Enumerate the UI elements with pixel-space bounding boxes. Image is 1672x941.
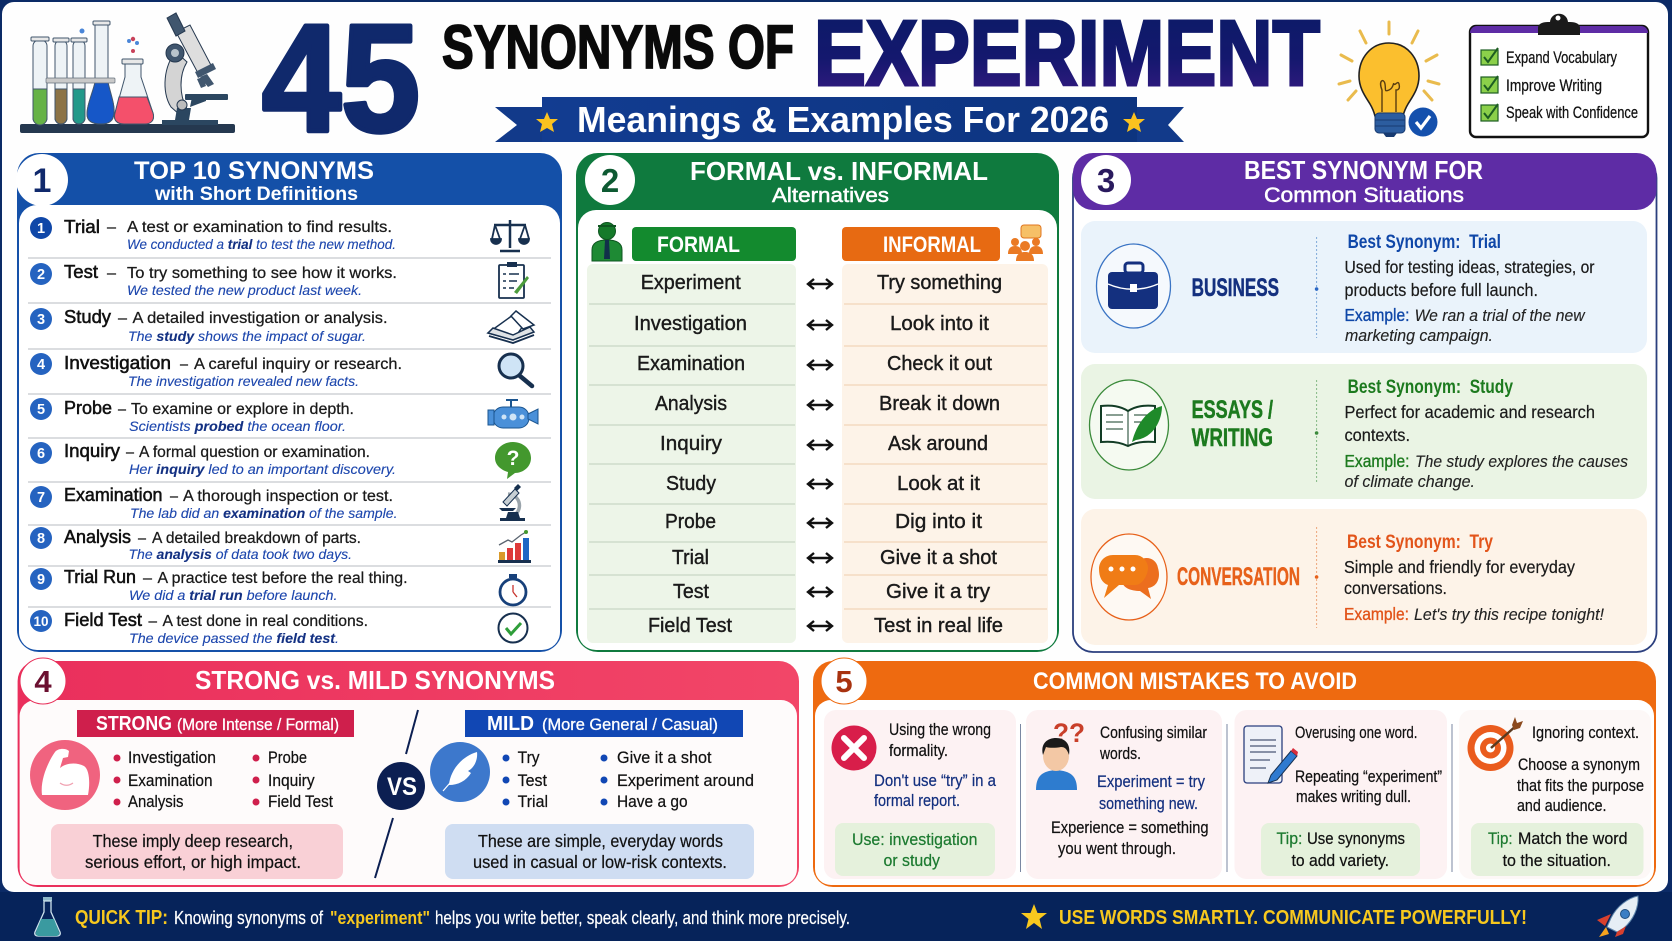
row 5: Probe: Scientists probed the ocean floor. <box>129 418 346 434</box>
formal column: Field Test <box>648 615 732 637</box>
card: conversation: Best Synonym: Try <box>1347 532 1493 553</box>
strong note: serious effort, or high impact. <box>85 852 301 872</box>
icon: muscle <box>30 740 100 810</box>
strong bullet list <box>114 749 333 811</box>
VS badge <box>375 710 425 878</box>
clipboard checklist <box>1470 14 1648 137</box>
panel 1 heading: TOP 10 SYNONYMS <box>134 157 374 185</box>
mistake 2: confusing similar words: Confusing similar <box>1100 724 1207 742</box>
title: synonyms of: SYNONYMS OF <box>442 13 794 81</box>
icon: submarine probe <box>488 400 538 428</box>
informal column: Check it out <box>887 353 992 375</box>
mild note: These are simple, everyday words <box>478 831 723 851</box>
icon: informal group <box>1008 225 1043 261</box>
card: essays and writing: Best Synonym: Study <box>1348 377 1513 398</box>
row 9: Trial Run <box>30 566 408 603</box>
card: business: products before full launch. <box>1344 280 1538 300</box>
strong note: These imply deep research, <box>93 831 293 851</box>
mild bullet list <box>502 749 754 811</box>
strong bullet list: Inquiry <box>268 772 315 790</box>
footer bar: QUICK TIP: <box>75 907 168 929</box>
mistake 4: ignoring context: Match the word <box>1518 830 1628 848</box>
row 3: Study: A detailed investigation or analysis. <box>132 310 388 327</box>
mistake 4: ignoring context: to the situation. <box>1503 852 1611 870</box>
card: essays and writing: ESSAYS / <box>1192 396 1273 424</box>
informal column: Dig into it <box>895 511 982 533</box>
strong heading <box>77 710 354 737</box>
mistake 2: confusing similar words: words. <box>1099 745 1141 763</box>
row 2: Test: Test <box>64 261 98 282</box>
informal heading pill <box>842 227 1000 261</box>
informal column: Give it a shot <box>880 547 997 569</box>
row 8: Analysis: Analysis <box>64 526 131 547</box>
card: essays and writing: contexts. <box>1344 425 1410 445</box>
subtitle ribbon: Meanings & Examples For 2026 <box>577 99 1109 140</box>
icon: document and pencil <box>1244 726 1298 783</box>
icon: red cross <box>832 726 876 770</box>
row 10: Field Test: A test done in real conditions. <box>162 613 368 630</box>
panel 3 heading <box>1081 155 1483 207</box>
informal heading pill: INFORMAL <box>883 232 981 257</box>
row 1: Trial: We conducted a trial to test the new method. <box>127 236 396 252</box>
icon: check circle <box>498 614 528 642</box>
formal column: Study <box>666 473 716 495</box>
mistake 3: overusing one word: Tip: <box>1276 830 1302 848</box>
row 3: Study: Study <box>64 306 112 327</box>
icon: clipboard list <box>499 262 529 298</box>
icon: flask <box>35 897 60 936</box>
row 10: Field Test <box>30 609 368 646</box>
row 2: Test: To try something to see how it works. <box>127 265 397 282</box>
row 4: Investigation: 4 <box>37 357 45 373</box>
mistake 4: ignoring context: that fits the purpose <box>1517 777 1644 795</box>
row 1: Trial <box>30 216 396 252</box>
mistake 1: wrong formality: or study <box>884 852 941 870</box>
icon: formal person <box>592 222 622 261</box>
mistake 3: overusing one word <box>1234 710 1447 879</box>
informal column: Test in real life <box>874 615 1003 637</box>
card: business: Example: <box>1344 305 1410 325</box>
mistake 4: ignoring context: and audience. <box>1517 797 1606 815</box>
card: essays and writing: The study explores the causes <box>1415 453 1628 471</box>
row 9: Trial Run: We did a trial run before launch. <box>129 587 338 603</box>
mild heading: (More General / Casual) <box>542 716 718 734</box>
strong bullet list: Probe <box>268 749 307 767</box>
row 1: Trial: 1 <box>37 221 45 237</box>
mistake 1: wrong formality: Using the wrong <box>889 721 991 739</box>
row 6: Inquiry <box>30 440 396 477</box>
row 9: Trial Run: Trial Run <box>64 566 136 587</box>
row 6: Inquiry: A formal question or examination. <box>139 444 370 461</box>
strong bullet list: Field Test <box>268 793 333 811</box>
panel 2 heading <box>585 155 988 207</box>
icon: lab glassware and microscope <box>20 13 235 133</box>
row 7: Examination: A thorough inspection or test. <box>183 488 393 505</box>
panel 3 heading: Common Situations <box>1264 184 1464 207</box>
panel 3 heading: 3 <box>1097 162 1115 199</box>
clipboard checklist: Improve Writing <box>1506 76 1602 95</box>
card: essays and writing: Perfect for academic and research <box>1344 402 1595 422</box>
footer bar: Knowing synonyms of <box>174 908 324 928</box>
mistake 1: wrong formality: formal report. <box>874 792 960 810</box>
card: business: Best Synonym: Trial <box>1348 232 1501 253</box>
row 5: Probe: To examine or explore in depth. <box>131 401 354 418</box>
icon: rocket <box>1597 896 1638 937</box>
row 10: Field Test: The device passed the field test. <box>129 630 339 646</box>
mild note: used in casual or low-risk contexts. <box>473 852 727 872</box>
strong bullet list: Investigation <box>128 749 216 767</box>
row 6: Inquiry: – <box>126 444 134 461</box>
icon: confused person <box>1036 718 1085 790</box>
panel 5 heading <box>821 658 1357 704</box>
card: business: marketing campaign. <box>1345 327 1493 345</box>
icon: feather <box>430 742 490 802</box>
card: conversation <box>1081 509 1647 645</box>
panel 4: strong vs mild <box>18 658 799 887</box>
clipboard checklist: Expand Vocabulary <box>1506 48 1617 67</box>
formal column: Inquiry <box>660 433 722 455</box>
row 8: Analysis <box>30 526 361 562</box>
mistake 3: overusing one word: makes writing dull. <box>1296 788 1411 806</box>
mistake 4: ignoring context: Tip: <box>1488 830 1513 848</box>
mild bullet list: Give it a shot <box>617 749 712 767</box>
panel 5 heading: 5 <box>835 664 853 699</box>
mistake 3: overusing one word: Use synonyms <box>1307 830 1405 848</box>
icon: target with arrow <box>1468 717 1523 771</box>
mild bullet list: Have a go <box>617 793 688 811</box>
row 7: Examination <box>30 484 398 521</box>
strong bullet list: Examination <box>128 772 212 790</box>
formal column: Investigation <box>634 313 747 335</box>
mistake 2: confusing similar words: Experience = something <box>1051 819 1208 837</box>
panel 3: best synonym <box>1073 153 1656 652</box>
row 3: Study: 3 <box>37 312 45 328</box>
row 7: Examination: Examination <box>64 484 162 505</box>
row 6: Inquiry: 6 <box>37 446 45 462</box>
row 10: Field Test: – <box>148 613 157 630</box>
panel 1 heading <box>16 154 374 206</box>
card: conversation: CONVERSATION <box>1177 563 1300 591</box>
row 4: Investigation: Investigation <box>64 352 171 373</box>
mistake 3: overusing one word: Repeating “experiment” <box>1295 768 1442 786</box>
formal column: Examination <box>637 353 745 375</box>
card: conversation: conversations. <box>1344 578 1447 598</box>
card: essays and writing: WRITING <box>1192 424 1273 452</box>
informal column: Look into it <box>890 313 989 335</box>
card: essays and writing: of climate change. <box>1344 473 1475 491</box>
row 3: Study <box>30 306 388 344</box>
mistake 3: overusing one word: Overusing one word. <box>1295 724 1418 742</box>
row 1: Trial: A test or examination to find results. <box>127 219 392 236</box>
panel 4 heading <box>20 658 555 704</box>
row 8: Analysis: A detailed breakdown of parts. <box>152 530 361 547</box>
formal column: Test <box>673 581 709 603</box>
formal column: Probe <box>665 511 716 533</box>
row 6: Inquiry: Her inquiry led to an important discovery. <box>129 461 396 477</box>
mistake 1: wrong formality <box>824 710 1016 879</box>
strong heading: (More Intense / Formal) <box>177 716 339 734</box>
formal column <box>587 264 796 643</box>
formal column: Experiment <box>641 272 741 294</box>
row 1: Trial: Trial <box>64 216 100 237</box>
row 9: Trial Run: A practice test before the real thing. <box>158 570 408 587</box>
row 4: Investigation: – <box>180 356 188 373</box>
row 2: Test <box>30 261 397 298</box>
icon: magnifying glass <box>499 354 532 386</box>
row 8: Analysis: The analysis of data took two days. <box>128 546 352 562</box>
card: essays and writing: Example: <box>1344 451 1410 471</box>
panel 2 heading: 2 <box>601 162 619 199</box>
informal column: Give it a try <box>886 581 990 603</box>
mistake 2: confusing similar words: something new. <box>1099 795 1198 813</box>
card: business <box>1081 221 1647 353</box>
panel 1 heading: with Short Definitions <box>154 183 358 205</box>
mistake 4: ignoring context: Choose a synonym <box>1518 756 1640 774</box>
panel 1: top 10 synonyms <box>16 153 562 652</box>
informal column: Try something <box>877 272 1002 294</box>
mistake 2: confusing similar words: you went through. <box>1058 840 1176 858</box>
mild bullet list: Experiment around <box>617 772 754 790</box>
row 5: Probe <box>30 397 354 434</box>
panel 1 heading: 1 <box>33 162 51 200</box>
icon: bar chart <box>498 530 531 563</box>
mild heading <box>465 710 743 737</box>
panel 4 heading: 4 <box>34 664 52 699</box>
icon: question bubble: ? <box>507 447 519 470</box>
row 5: Probe: 5 <box>37 402 45 418</box>
mistake 2: confusing similar words <box>1026 710 1222 879</box>
row 3: Study: – <box>118 310 127 327</box>
strong bullet list: Analysis <box>128 793 184 811</box>
row 4: Investigation: The investigation revealed new facts. <box>128 373 359 389</box>
title: experiment: EXPERIMENT <box>814 1 1320 105</box>
row 1: Trial: – <box>107 219 116 236</box>
VS badge: VS <box>387 773 417 801</box>
row 5: Probe: – <box>118 401 126 418</box>
footer bar: helps you write better, speak clearly, and think more precisely. <box>435 908 850 928</box>
mild note <box>445 824 754 879</box>
arrows between columns <box>808 279 832 631</box>
mistake 2: confusing similar words: Experiment = try <box>1097 773 1206 791</box>
icon: light bulb with check <box>1339 22 1439 137</box>
card: business: We ran a trial of the new <box>1415 307 1586 325</box>
footer bar: USE WORDS SMARTLY. COMMUNICATE POWERFULLY! <box>1059 907 1527 929</box>
panel 2 heading: FORMAL vs. INFORMAL <box>690 156 988 186</box>
card: conversation: Simple and friendly for everyday <box>1344 557 1575 577</box>
formal heading pill: FORMAL <box>657 232 740 257</box>
row 8: Analysis: – <box>138 530 146 547</box>
mistake 4: ignoring context: Ignoring context. <box>1532 724 1639 742</box>
panel 3 heading: BEST SYNONYM FOR <box>1244 155 1483 185</box>
mistake 1: wrong formality: formality. <box>889 742 948 760</box>
mistake 1: wrong formality: Don't use “try” in a <box>874 772 997 790</box>
icon: small microscope <box>499 484 525 521</box>
card: business: BUSINESS <box>1192 274 1279 302</box>
formal column: Analysis <box>655 393 727 415</box>
strong heading: STRONG <box>96 713 172 735</box>
icon: briefcase <box>1096 244 1170 328</box>
row 9: Trial Run: 9 <box>37 572 45 588</box>
mistake 1: wrong formality: Use: investigation <box>852 831 978 849</box>
row 7: Examination: 7 <box>37 490 45 506</box>
strong note <box>51 824 343 879</box>
header <box>20 0 1648 164</box>
icon: speech bubbles <box>1091 534 1167 620</box>
informal column: Ask around <box>888 433 988 455</box>
footer bar <box>0 892 1672 941</box>
card: conversation: Example: <box>1344 604 1409 624</box>
row 2: Test: – <box>107 265 116 282</box>
row 7: Examination: The lab did an examination of the sample. <box>130 505 398 521</box>
row 4: Investigation: A careful inquiry or research. <box>194 356 402 373</box>
card: business: Used for testing ideas, strategies, or <box>1344 257 1595 277</box>
row 4: Investigation <box>30 352 402 389</box>
icon: scales <box>491 220 529 251</box>
icon: book with quill <box>1090 380 1168 470</box>
row 2: Test: We tested the new product last week. <box>127 282 362 298</box>
panel 5: common mistakes <box>813 658 1656 887</box>
panel 5 heading: COMMON MISTAKES TO AVOID <box>1033 668 1357 695</box>
icon: star <box>1021 904 1047 929</box>
icon: question bubble <box>495 442 531 479</box>
informal column: Break it down <box>879 393 1000 415</box>
row 10: Field Test: Field Test <box>64 609 142 630</box>
row 8: Analysis: 8 <box>37 531 45 547</box>
informal column <box>842 264 1048 643</box>
formal column: Trial <box>672 547 709 569</box>
panel 2 heading: Alternatives <box>772 185 889 207</box>
panel 2: formal vs informal <box>576 153 1059 652</box>
footer bar: "experiment" <box>330 908 430 928</box>
formal heading pill <box>632 227 796 261</box>
row 6: Inquiry: Inquiry <box>64 440 121 461</box>
icon: open book <box>488 311 534 343</box>
panel 4 heading: STRONG vs. MILD SYNONYMS <box>195 665 555 695</box>
row 7: Examination: – <box>170 488 178 505</box>
mild bullet list: Test <box>518 772 547 790</box>
informal column: Look at it <box>897 473 980 495</box>
card: conversation: Let's try this recipe tonight! <box>1414 606 1604 624</box>
row 9: Trial Run: – <box>143 570 152 587</box>
row 5: Probe: Probe <box>64 397 112 418</box>
row 10: Field Test: 10 <box>33 614 49 629</box>
row 2: Test: 2 <box>37 267 45 283</box>
row 3: Study: The study shows the impact of sugar. <box>128 328 366 344</box>
mistake 3: overusing one word: to add variety. <box>1292 852 1389 870</box>
mistake 4: ignoring context <box>1459 710 1651 879</box>
mild bullet list: Try <box>518 749 540 767</box>
icon: stopwatch <box>500 574 526 605</box>
icon: confused person: ?? <box>1053 718 1085 748</box>
card: essays and writing <box>1081 364 1647 499</box>
mild bullet list: Trial <box>518 793 548 811</box>
mild heading: MILD <box>487 713 534 735</box>
